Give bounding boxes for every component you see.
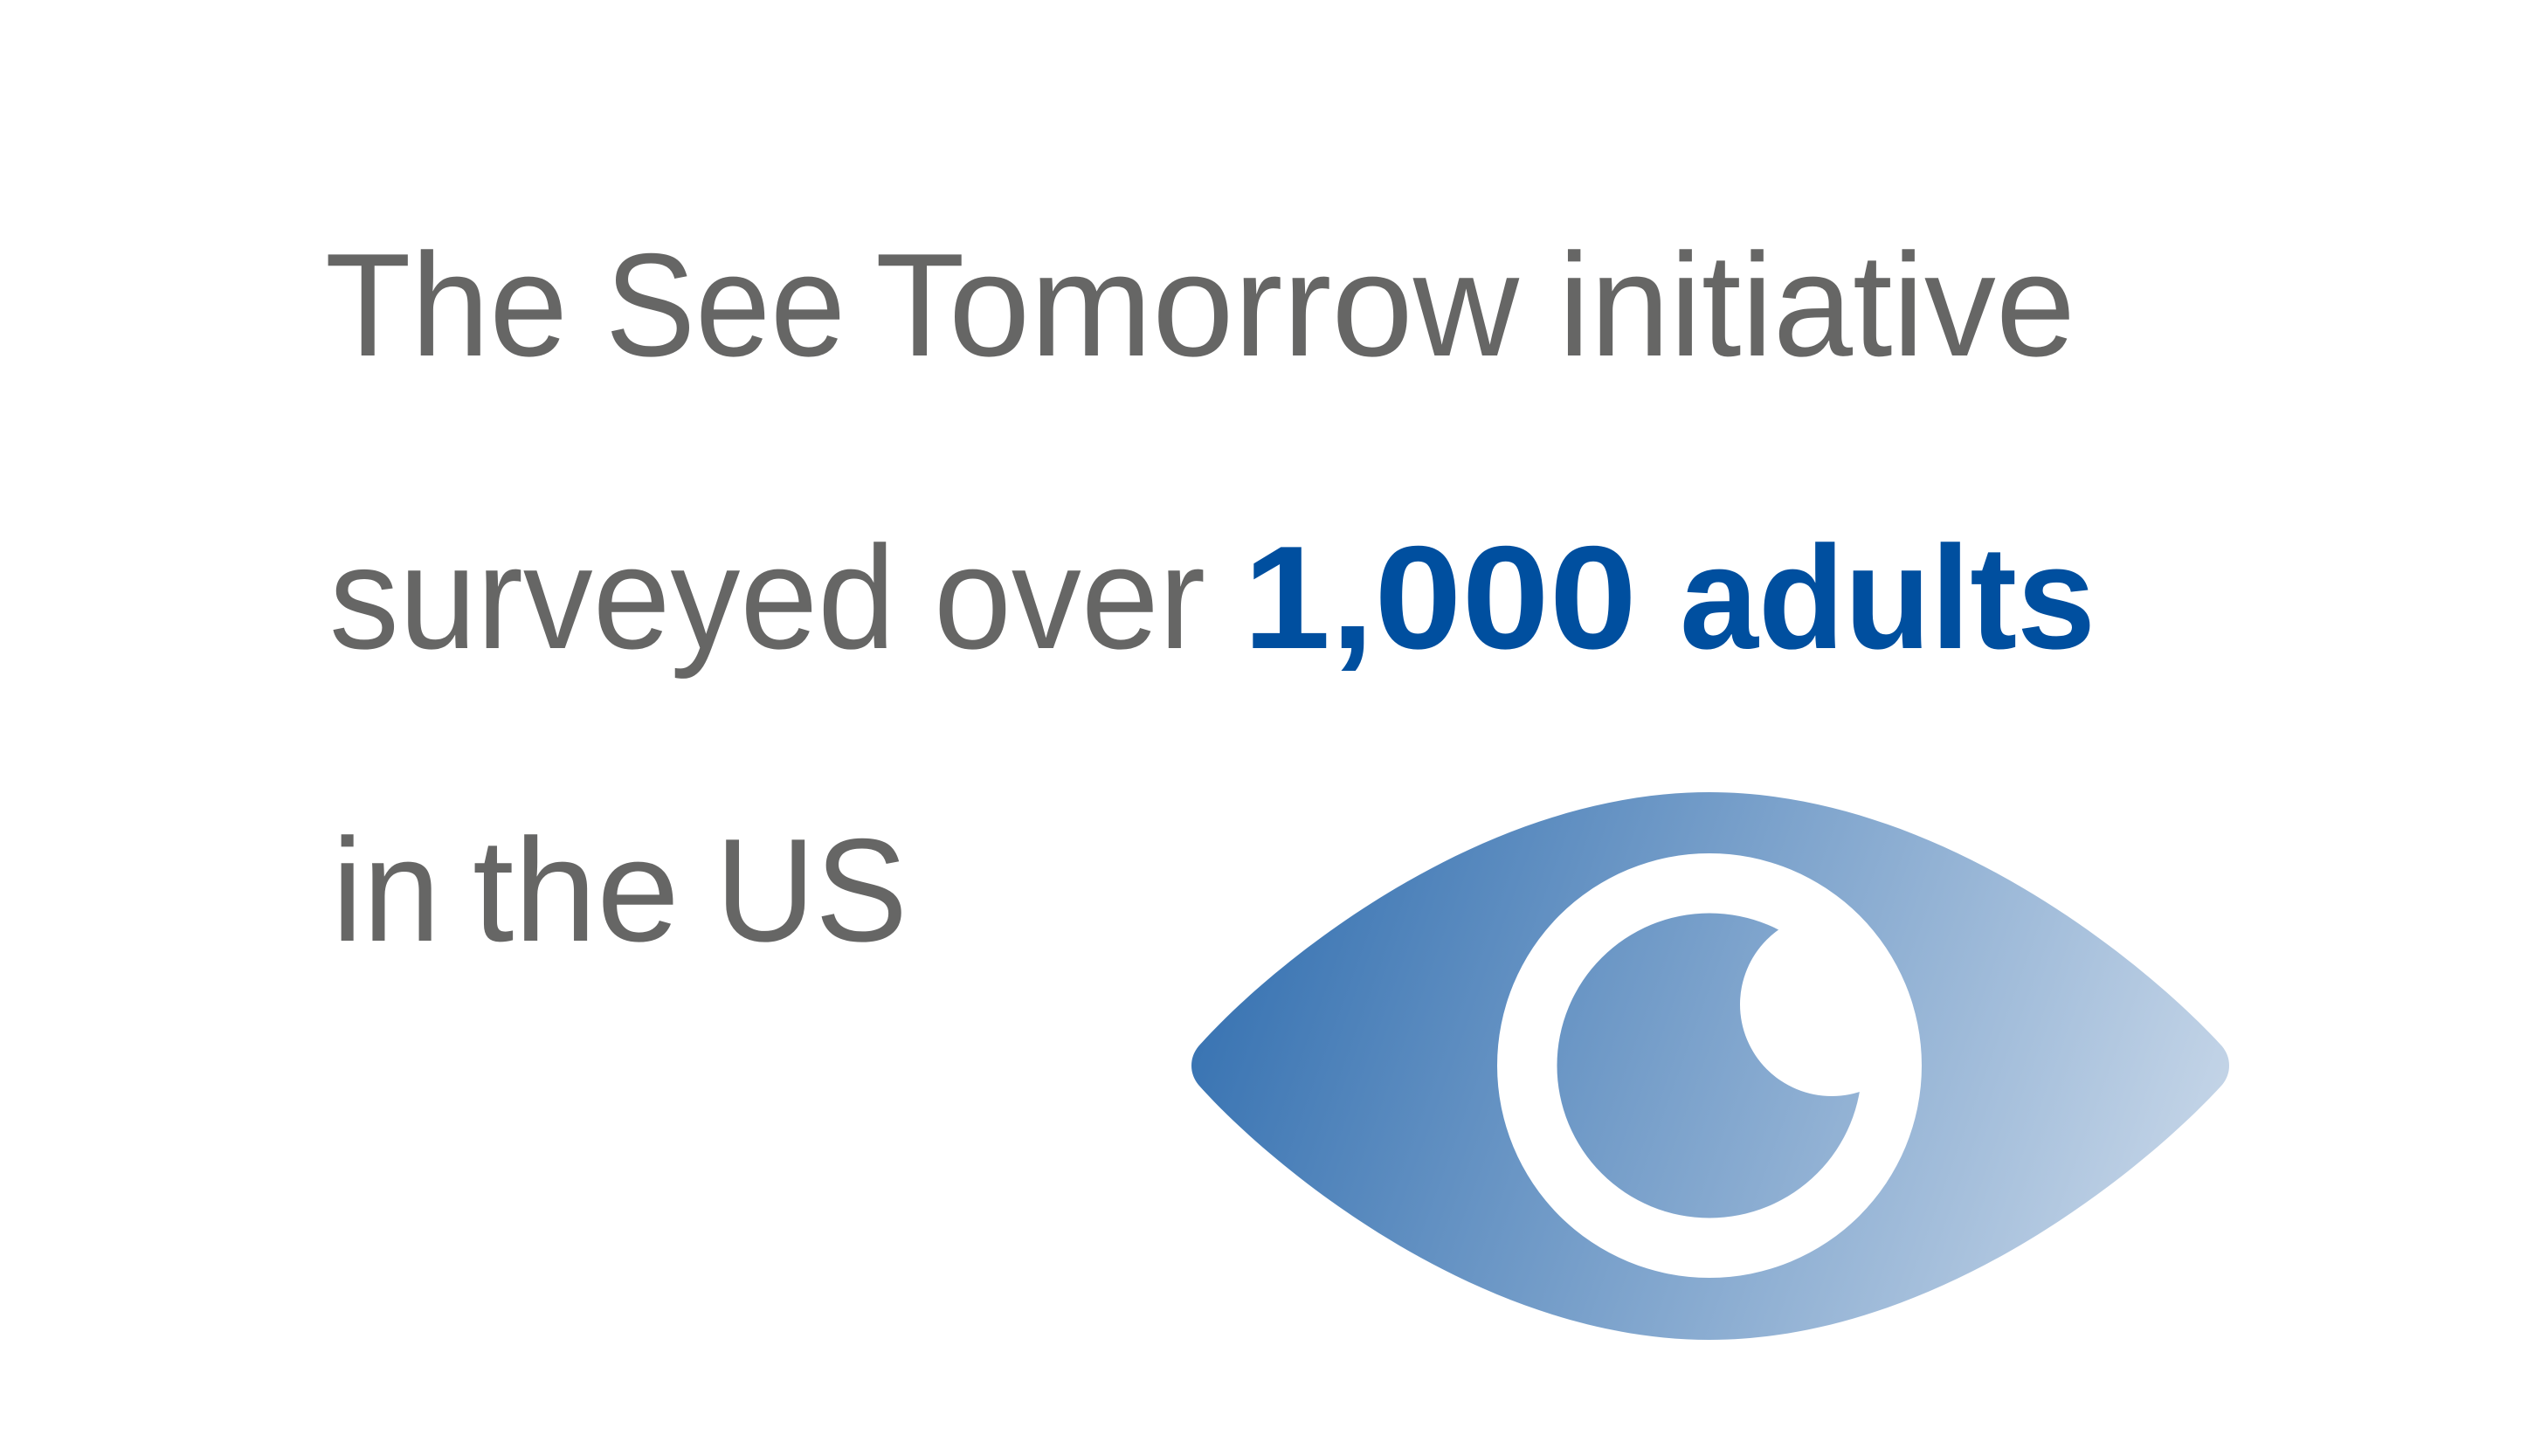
line 2: over bbox=[934, 515, 1205, 680]
icon: eye bbox=[1191, 792, 2229, 1340]
line 1: initiative bbox=[1558, 223, 2075, 387]
line 2 bbox=[329, 515, 2096, 680]
line 3 bbox=[332, 808, 908, 972]
line 1: Tomorrow bbox=[875, 223, 1520, 387]
line 3: the bbox=[473, 808, 680, 972]
highlighted figure: 1,000 bbox=[1243, 515, 1637, 680]
line 3: in bbox=[332, 808, 440, 972]
line 1 bbox=[325, 223, 2075, 387]
line 2: surveyed bbox=[329, 515, 895, 680]
icon: pupil bbox=[1557, 914, 1862, 1218]
highlighted figure: adults bbox=[1680, 515, 2096, 680]
text: survey statement bbox=[325, 223, 2096, 972]
line 1: See bbox=[605, 223, 846, 387]
line 1: The bbox=[325, 223, 568, 387]
highlighted figure bbox=[1243, 515, 2096, 680]
infographic canvas bbox=[328, 249, 2229, 1340]
line 3: US bbox=[715, 808, 908, 972]
